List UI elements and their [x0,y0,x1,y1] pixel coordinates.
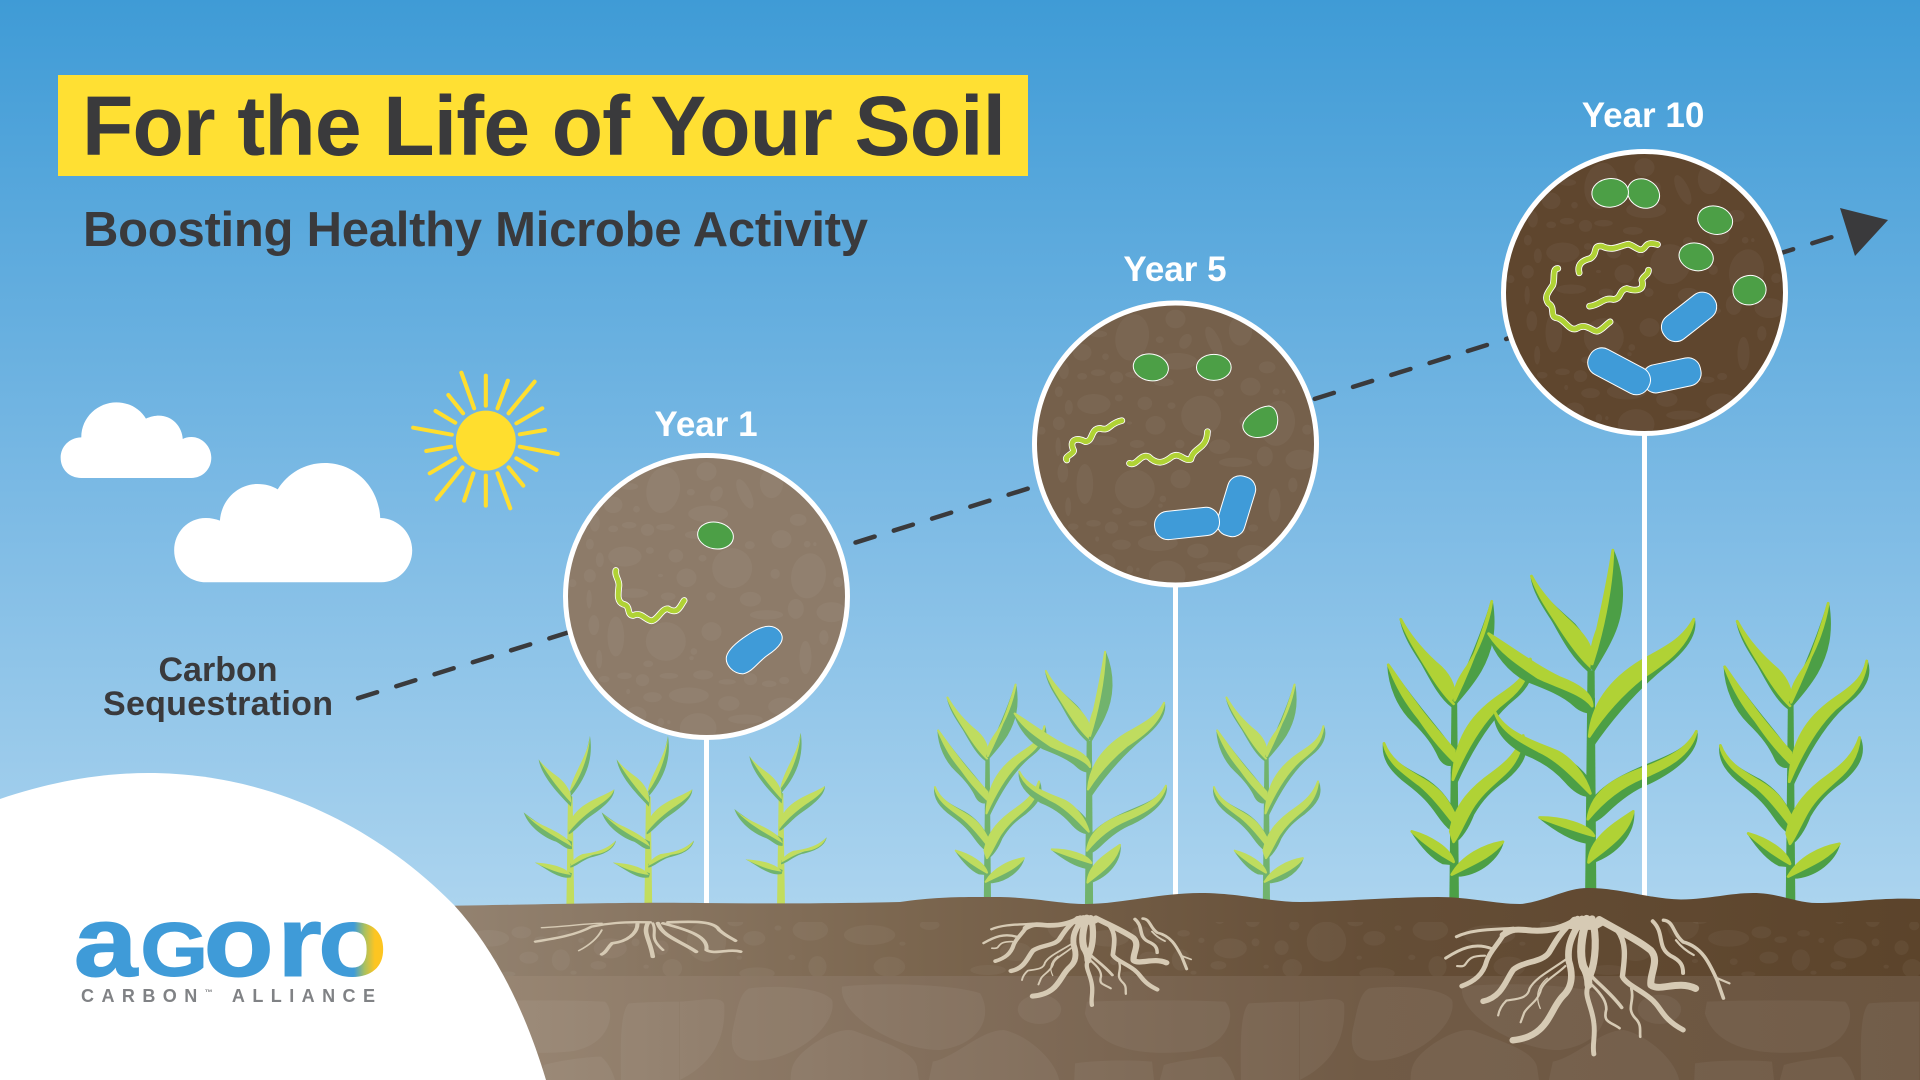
logo wordmark: G [140,908,208,993]
logo: agoro carbon alliance [74,885,388,1006]
year 10 microbes [1546,173,1768,399]
year 5 microbes [1066,351,1278,541]
year 10 microbe circle [1504,152,1786,439]
logo tagline: ™ [205,988,213,997]
year 5 label: Year 5 [1123,250,1227,289]
subsoil layer [440,976,1920,1080]
label: carbon sequestration [103,651,333,723]
topsoil pebbles [1692,922,1920,976]
plants: year 10 [1384,550,1868,906]
dashed arrow line: carbon sequestration [358,208,1888,698]
subtitle: Boosting Healthy Microbe Activity [83,203,868,257]
label: carbon sequestration: Sequestration [103,685,333,723]
icon: large cloud [174,463,412,582]
year 5 microbe circle [1034,303,1316,591]
plants: year 1 [524,733,827,913]
logo wordmark: o [317,885,388,997]
icon: small cloud [61,402,211,478]
plants: year 5 [935,652,1325,914]
label: carbon sequestration: Carbon [158,651,278,689]
title banner: For the Life of Your Soil [82,79,1006,173]
soil profile [454,888,1920,1080]
subsoil rocks [1179,984,1919,1080]
year 10 label: Year 10 [1582,96,1704,135]
icon: sun [413,373,558,508]
roots: year 5 [984,916,1191,1005]
year 1 microbe circle [566,456,848,743]
logo wordmark: a [74,885,139,997]
roots: year 10 [1446,917,1729,1054]
logo tagline: CARBON [81,986,197,1006]
connector stems [704,434,1647,908]
year 1 microbes [616,519,782,674]
logo wordmark: o [204,885,274,997]
topsoil layer [440,888,1920,980]
logo wordmark: r [277,885,322,997]
year 1 label: Year 1 [654,405,758,444]
roots: year 1 [536,922,741,957]
logo tagline: ALLIANCE [220,986,375,1006]
white corner panel [0,773,546,1080]
